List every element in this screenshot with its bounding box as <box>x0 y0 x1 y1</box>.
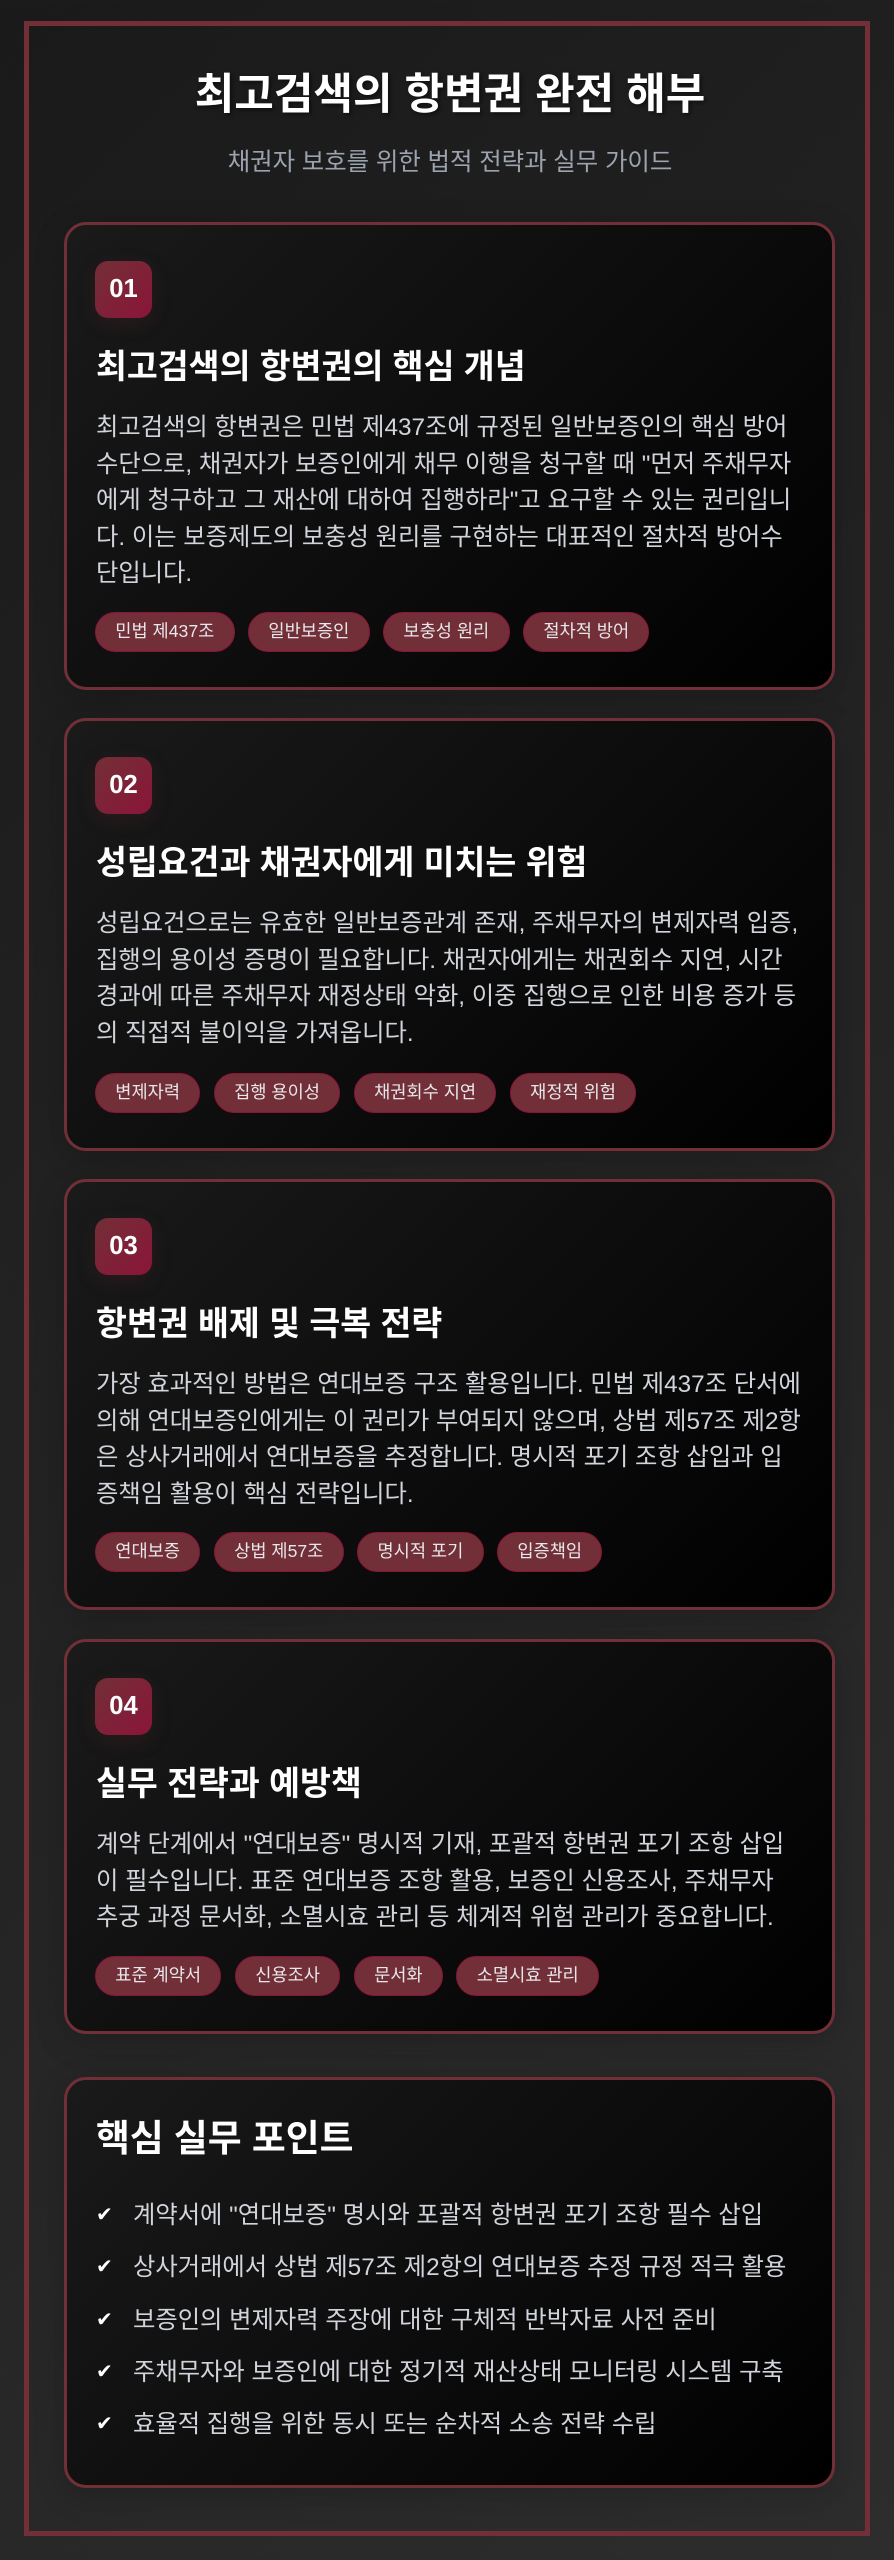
body text 04 <box>96 1831 784 1931</box>
panel: key practical points: ✔ <box>96 2254 113 2278</box>
body text 03: 은 상사거래에서 연대보증을 추정합니다. 명시적 포기 조항 삽입과 입 <box>96 1444 783 1471</box>
heading: key points: 핵심 실무 포인트 <box>96 2118 353 2159</box>
list item 3 <box>96 2307 717 2334</box>
badge 04 <box>95 1678 152 1735</box>
tags 04 <box>95 1956 599 1996</box>
panel: section 04 practical strategy <box>64 1639 835 2034</box>
panel: key practical points: ✔ <box>96 2202 113 2226</box>
body text 01: 에게 청구하고 그 재산에 대하여 집행하라"고 요구할 수 있는 권리입니 <box>96 487 791 514</box>
tags 03: 연대보증 <box>115 1541 180 1561</box>
tags 03: 상법 제57조 <box>234 1541 323 1561</box>
panel: key practical points: 보증인의 변제자력 주장에 대한 구체적 반박자료 사전 준비 <box>133 2307 717 2334</box>
panel: key practical points: 효율적 집행을 위한 동시 또는 순차적 소송 전략 수립 <box>133 2411 656 2438</box>
panel: key practical points <box>64 2077 835 2488</box>
body text 04: 계약 단계에서 "연대보증" 명시적 기재, 포괄적 항변권 포기 조항 삽입 <box>96 1831 784 1858</box>
body text 02: 경과에 따른 주채무자 재정상태 악화, 이중 집행으로 인한 비용 증가 등 <box>96 983 796 1010</box>
panel: section 02 requirements and risks <box>64 718 835 1151</box>
subtitle: 채권자 보호를 위한 법적 전략과 실무 가이드 <box>228 149 672 176</box>
heading 01: 최고검색의 항변권의 핵심 개념 <box>96 349 526 386</box>
body text 02 <box>96 910 798 1047</box>
badge 01: 01 <box>109 275 138 303</box>
panel: key practical points: ✔ <box>96 2411 113 2435</box>
badge 02: 02 <box>109 771 138 799</box>
tags 02: 채권회수 지연 <box>374 1082 476 1102</box>
badge 04: 04 <box>109 1692 138 1720</box>
heading 04: 실무 전략과 예방책 <box>96 1766 362 1803</box>
badge 01 <box>95 261 152 318</box>
panel: section 03 exclusion strategy <box>64 1179 835 1610</box>
panel: key practical points: ✔ <box>96 2359 113 2383</box>
panel: key practical points: 주채무자와 보증인에 대한 정기적 재산상태 모니터링 시스템 구축 <box>133 2359 784 2386</box>
body text 03: 가장 효과적인 방법은 연대보증 구조 활용입니다. 민법 제437조 단서에 <box>96 1371 801 1398</box>
tags 02: 재정적 위험 <box>530 1082 616 1102</box>
tags 02: 변제자력 <box>115 1082 180 1102</box>
body text 01: 수단으로, 채권자가 보증인에게 채무 이행을 청구할 때 "먼저 주채무자 <box>96 451 791 478</box>
panel: section 01 core concept <box>64 222 835 690</box>
tags 01 <box>95 612 649 652</box>
title: 최고검색의 항변권 완전 해부 <box>195 71 705 119</box>
list item 4 <box>96 2359 784 2386</box>
body text 03 <box>96 1371 801 1508</box>
tags 04: 문서화 <box>374 1965 423 1985</box>
badge 03 <box>95 1218 152 1275</box>
body text 01: 최고검색의 항변권은 민법 제437조에 규정된 일반보증인의 핵심 방어 <box>96 414 787 441</box>
body text 01: 단입니다. <box>96 560 192 587</box>
body text 03: 의해 연대보증인에게는 이 권리가 부여되지 않으며, 상법 제57조 제2항 <box>96 1408 801 1435</box>
panel: key practical points: 상사거래에서 상법 제57조 제2항의 연대보증 추정 규정 적극 활용 <box>133 2254 786 2281</box>
body text 01: 다. 이는 보증제도의 보충성 원리를 구현하는 대표적인 절차적 방어수 <box>96 524 783 551</box>
tags 03: 명시적 포기 <box>377 1541 463 1561</box>
tags 02 <box>95 1073 636 1113</box>
tags 04: 신용조사 <box>255 1965 320 1985</box>
tags 01: 절차적 방어 <box>543 621 629 641</box>
body text 04: 이 필수입니다. 표준 연대보증 조항 활용, 보증인 신용조사, 주채무자 <box>96 1868 774 1895</box>
body text 02: 성립요건으로는 유효한 일반보증관계 존재, 주채무자의 변제자력 입증, <box>96 910 798 937</box>
badge 02 <box>95 757 152 814</box>
tags 04: 소멸시효 관리 <box>477 1965 579 1985</box>
tags 01: 일반보증인 <box>268 621 349 641</box>
list item 5 <box>96 2411 656 2438</box>
heading 02: 성립요건과 채권자에게 미치는 위험 <box>96 845 587 882</box>
list item 2 <box>96 2254 786 2281</box>
panel: key practical points: ✔ <box>96 2307 113 2331</box>
tags 03: 입증책임 <box>517 1541 582 1561</box>
body text 02: 의 직접적 불이익을 가져옵니다. <box>96 1020 414 1047</box>
panel: key practical points: 계약서에 "연대보증" 명시와 포괄적 항변권 포기 조항 필수 삽입 <box>133 2202 763 2229</box>
list item 1 <box>96 2202 763 2229</box>
body text 04: 추궁 과정 문서화, 소멸시효 관리 등 체계적 위험 관리가 중요합니다. <box>96 1904 774 1931</box>
body text 02: 집행의 용이성 증명이 필요합니다. 채권자에게는 채권회수 지연, 시간 <box>96 947 783 974</box>
tags 02: 집행 용이성 <box>234 1082 320 1102</box>
tags 04: 표준 계약서 <box>115 1965 201 1985</box>
body text 01 <box>96 414 791 587</box>
tags 01: 민법 제437조 <box>115 621 214 641</box>
badge 03: 03 <box>109 1232 138 1260</box>
heading 03: 항변권 배제 및 극복 전략 <box>96 1306 442 1343</box>
tags 01: 보충성 원리 <box>403 621 489 641</box>
tags 03 <box>95 1532 602 1572</box>
body text 03: 증책임 활용이 핵심 전략입니다. <box>96 1481 414 1508</box>
